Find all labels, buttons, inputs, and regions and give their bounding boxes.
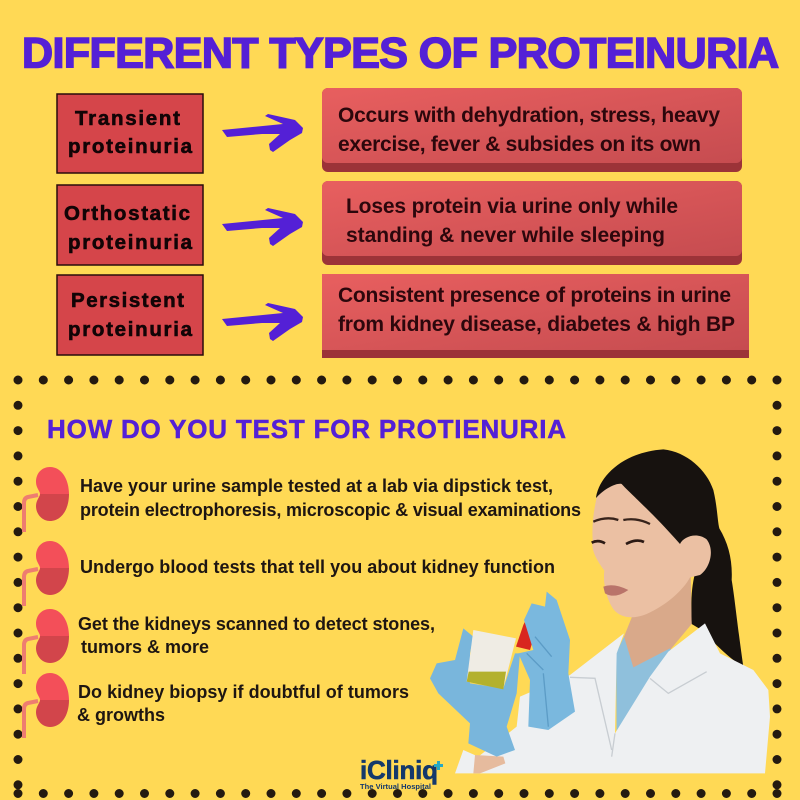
test tube [516,612,540,650]
list item: kidney biopsy: & growths [77,705,165,725]
description: persistent: Consistent presence of proteins in urine [338,284,731,307]
list item: kidney biopsy: Do kidney biopsy if doubtful of tumors [78,682,409,702]
list item: blood tests: Undergo blood tests that tell you about kidney function [80,557,555,577]
lab coat [455,623,770,773]
list item: kidney scan [24,602,435,674]
list item: kidney scan: Get the kidneys scanned to detect stones, [78,614,435,634]
label box: orthostatic: Orthostatic [64,202,190,225]
label box: transient: Transient [75,107,180,130]
label box: transient: proteinuria [68,135,193,158]
arrow: transient [222,114,303,152]
plus sign [434,761,443,770]
right glove [518,592,575,730]
description: orthostatic: standing & never while sleeping [346,224,665,247]
list item: kidney scan: tumors & more [81,637,209,657]
panel: transient proteinuria row [57,88,742,173]
arm skin [473,755,505,773]
label box: transient [57,94,203,173]
face [592,484,711,617]
label box: persistent: Persistent [71,289,184,312]
list item: urine sample: protein electrophoresis, microscopic & visual examinations [80,500,581,520]
logo: iCliniq: The Virtual Hospital [360,782,431,791]
description: transient: exercise, fever & subsides on its own [338,133,701,156]
logo: iCliniq: iCliniq [360,755,438,785]
lips [603,585,628,596]
arrow: orthostatic [222,208,303,246]
title: DIFFERENT TYPES OF PROTEINURIA [22,30,779,78]
description: transient [322,88,742,172]
icon: kidney 2 [22,541,69,606]
illustration: lab technician with urine sample [430,449,770,773]
eyes and brows [593,518,650,524]
label box: orthostatic: proteinuria [68,231,193,254]
list item: urine sample [24,460,581,532]
description: persistent [322,274,749,358]
panel: persistent proteinuria row [57,274,749,358]
cup [467,630,516,688]
hair [596,449,743,667]
list item: kidney biopsy [24,666,409,738]
description: orthostatic: Loses protein via urine only while [346,195,678,218]
description: persistent: from kidney disease, diabetes & high BP [338,313,735,336]
list item: urine sample: Have your urine sample tested at a lab via dipstick test, [80,476,553,496]
icon: kidney 1 [22,467,69,532]
icon: kidney 3 [22,609,69,674]
label box: persistent: proteinuria [68,318,193,341]
description: transient: Occurs with dehydration, stress, heavy [338,104,720,127]
heading: how do you test: HOW DO YOU TEST FOR PROTIENURIA [47,414,566,444]
shirt [616,637,673,737]
list item: blood tests [24,534,555,606]
icon: kidney 4 [22,673,69,738]
label box: orthostatic [57,185,203,265]
panel: orthostatic proteinuria row [57,181,742,265]
description: orthostatic [322,181,742,265]
neck [623,573,692,670]
left glove [430,628,520,757]
arrow: persistent [222,303,303,341]
label box: persistent [57,275,203,355]
